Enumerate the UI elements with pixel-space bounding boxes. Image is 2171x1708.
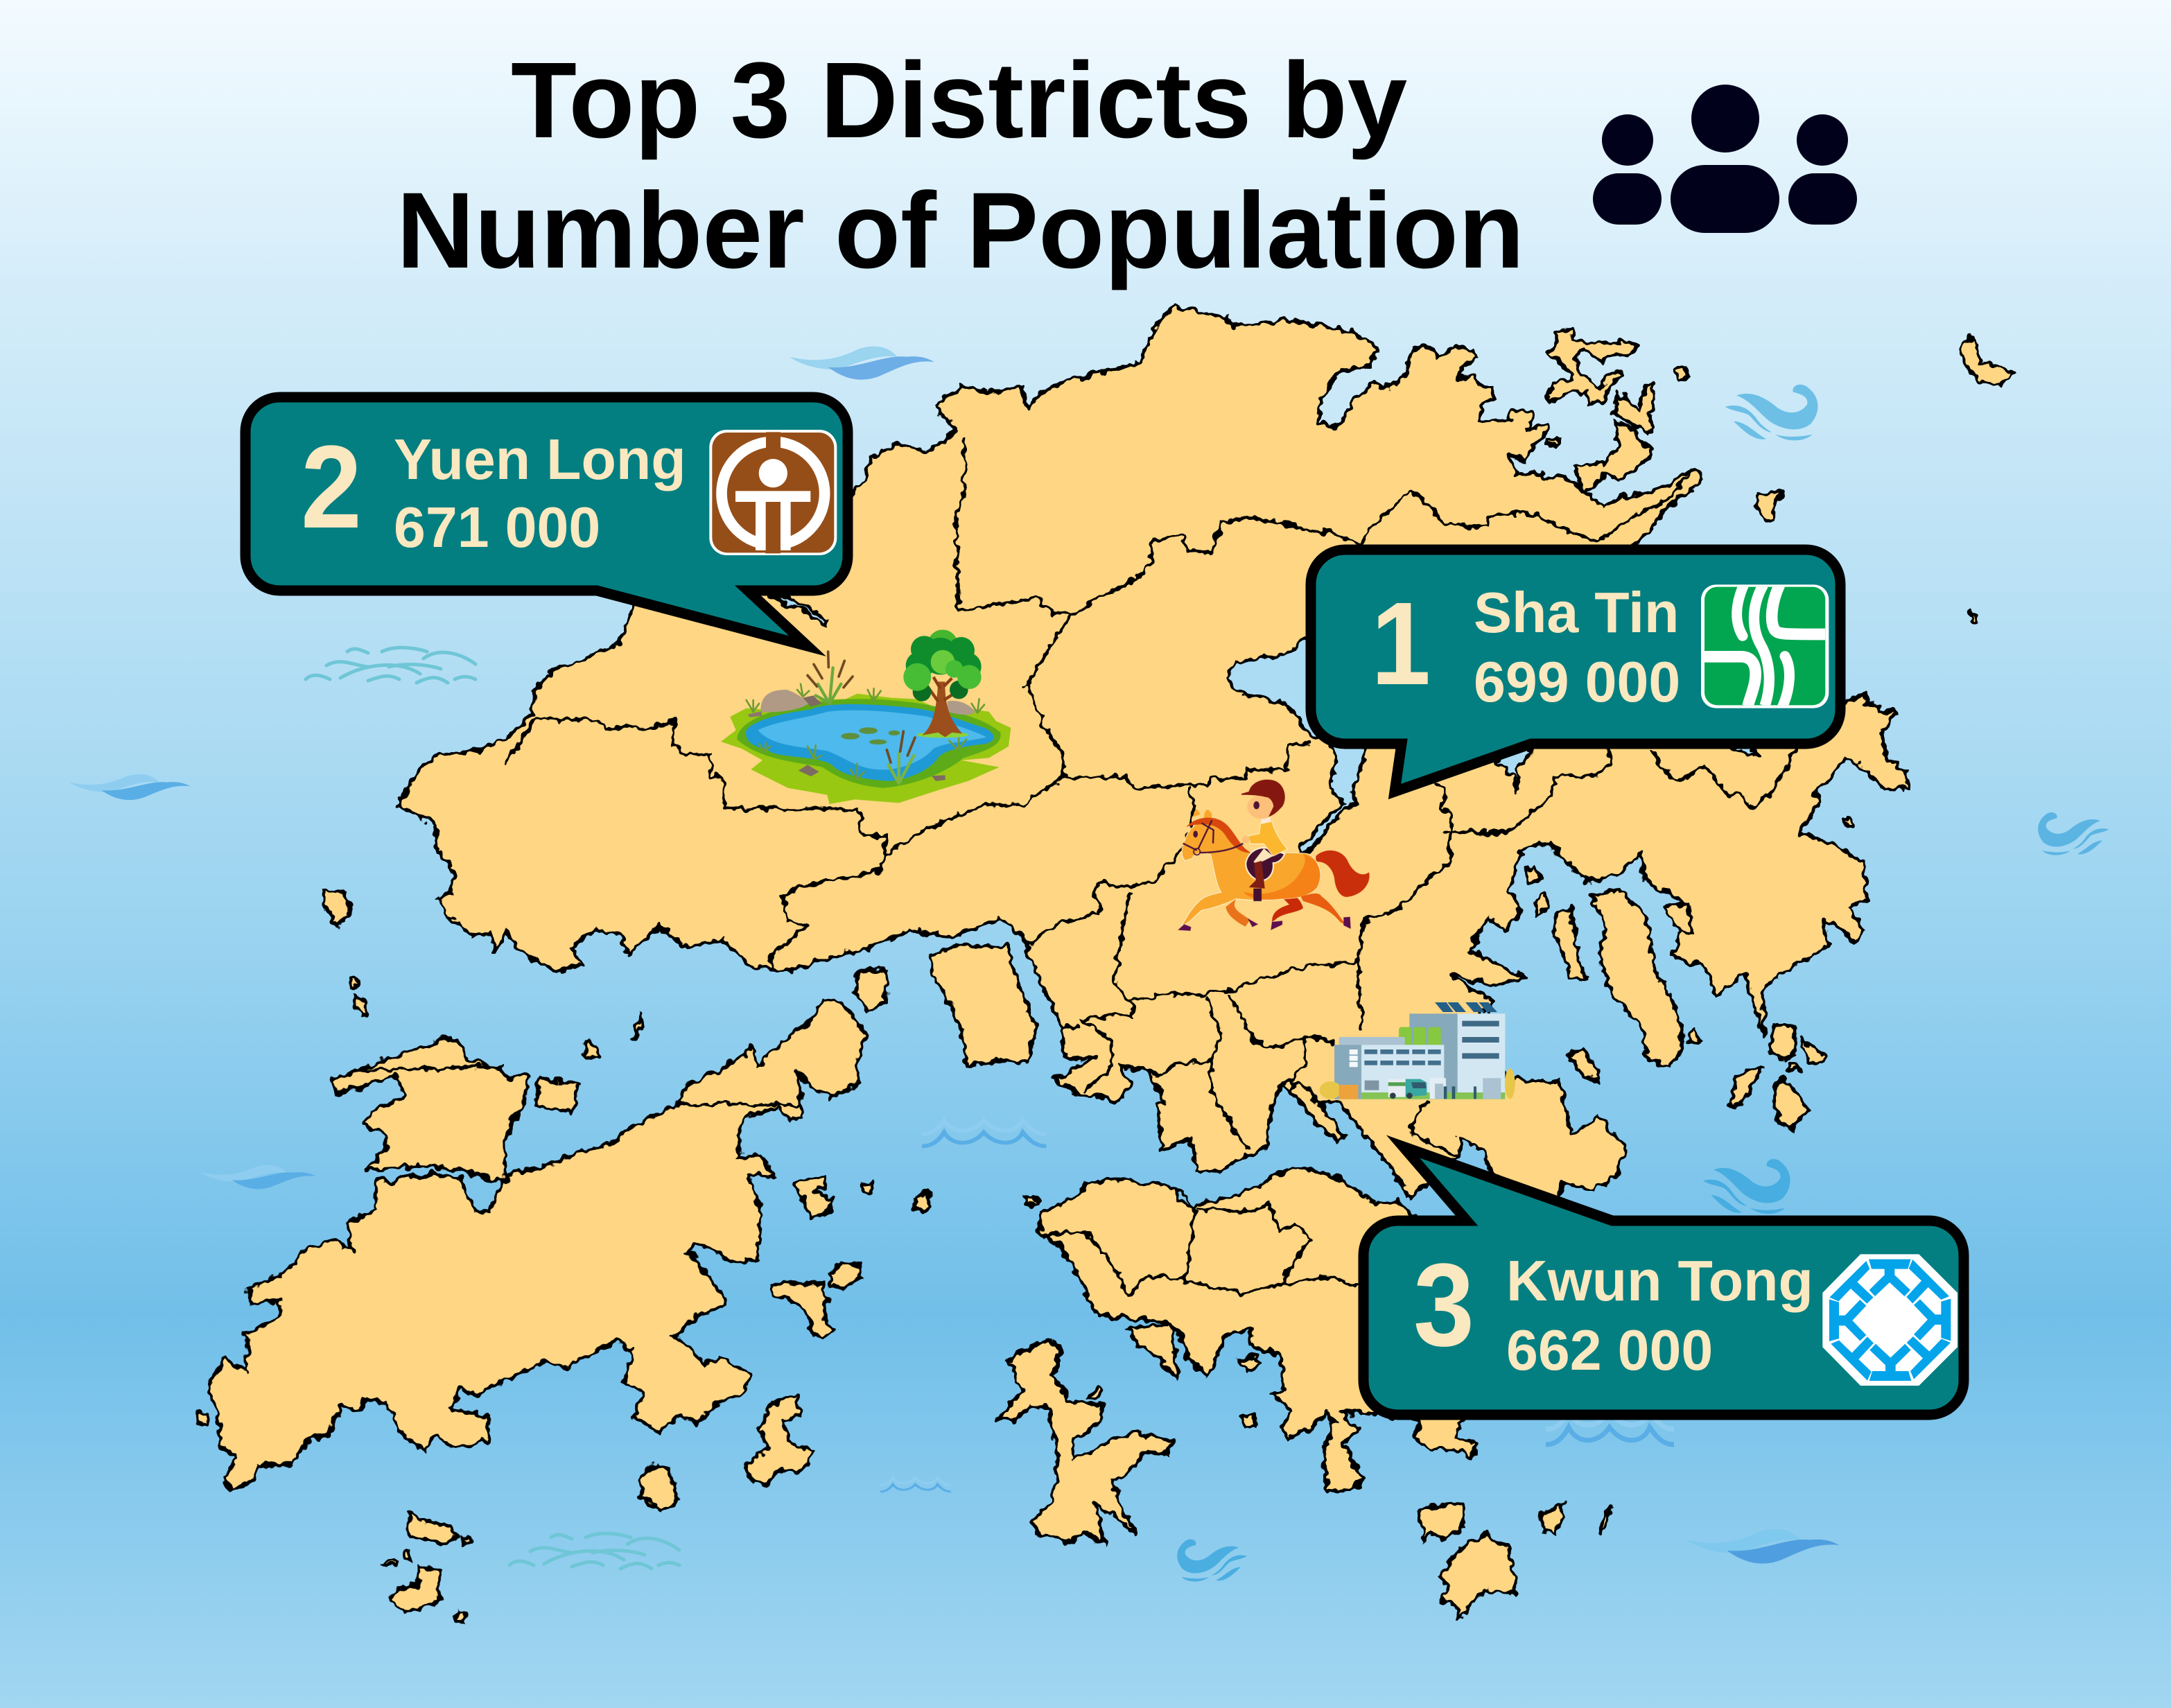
illustration: pond and tree [721, 629, 1011, 804]
saddle [1246, 848, 1284, 880]
truck box [1388, 1079, 1406, 1097]
decorative sea waves [69, 347, 2109, 1582]
callout: Kwun Tong rank 3 [1363, 1147, 1964, 1415]
southern islands [999, 1024, 1824, 1618]
rider leg [1253, 848, 1273, 864]
district name: Sha Tin [1474, 581, 1679, 645]
callout bubble [1363, 1147, 1964, 1415]
callout: Yuen Long rank 2 [245, 397, 848, 646]
loading door [1483, 1078, 1501, 1099]
hind quarter shade [1243, 854, 1320, 900]
Deep Bay inlet [770, 595, 825, 626]
callout bubble [245, 397, 848, 646]
rank number: 2 [301, 421, 362, 553]
small western islands [196, 970, 1037, 1623]
gate house door [1435, 1083, 1443, 1099]
illustration: factory [1319, 1002, 1515, 1099]
northern islands [1546, 329, 1786, 519]
tree islet [917, 732, 968, 738]
Lung Kwu Chau [322, 889, 349, 926]
low building roof [1339, 1037, 1405, 1046]
population: 699 000 [1474, 650, 1680, 714]
truck wheels [1390, 1092, 1413, 1099]
truck stripe [1388, 1082, 1406, 1086]
Hong Kong Island [999, 1024, 1824, 1618]
Lantau Island and western islands [196, 970, 1037, 1623]
title: Top 3 Districts by [511, 40, 1407, 160]
inner bays [1227, 638, 1363, 851]
shrubs [1319, 1068, 1515, 1099]
rank number: 1 [1371, 578, 1431, 710]
horse body [1182, 820, 1320, 925]
water highlight [758, 711, 986, 770]
district emblem: Kwun Tong [1822, 1254, 1958, 1386]
tall building windows [1462, 1021, 1499, 1058]
Hong Kong Island boundaries [1042, 1187, 1360, 1296]
horse eye [1193, 830, 1198, 837]
tall building front [1458, 1013, 1505, 1099]
workers [1444, 1086, 1476, 1099]
callout bubble [1311, 550, 1840, 792]
population: 662 000 [1506, 1318, 1713, 1382]
mane [1187, 818, 1251, 853]
airport runway line [357, 1067, 501, 1070]
side vents [1350, 1049, 1358, 1067]
water [746, 704, 994, 781]
truck cab [1406, 1079, 1427, 1097]
Sai Kung islands [1526, 335, 2014, 1066]
population: 671 000 [394, 496, 600, 559]
girth [1253, 889, 1262, 901]
district emblem: Yuen Long [709, 430, 837, 555]
low building side [1334, 1045, 1362, 1099]
grass tufts [747, 684, 984, 780]
New Territories and Kowloon mainland [322, 306, 2014, 1219]
green tanks [1399, 1027, 1441, 1048]
title [396, 40, 1524, 291]
solar panels [1435, 1002, 1497, 1012]
Lantau boundary line [676, 1104, 800, 1105]
lawn strip [1361, 1092, 1505, 1099]
gate house [1430, 1078, 1446, 1099]
hooves [1178, 917, 1351, 931]
Plover Cove inlet [1495, 741, 1534, 794]
rider eye [1253, 801, 1259, 809]
rider collar [1261, 817, 1271, 825]
illustration: horse rider [1178, 780, 1370, 931]
district name: Kwun Tong [1506, 1249, 1813, 1313]
rocks [748, 690, 975, 781]
near hind leg [1301, 894, 1346, 925]
pond grass [721, 694, 1011, 804]
district boundaries [507, 437, 1795, 1156]
low building windows [1364, 1049, 1441, 1090]
lily pads [841, 727, 900, 744]
truck window [1411, 1082, 1427, 1088]
orange crates [1339, 1085, 1358, 1099]
district emblem: Sha Tin [1701, 582, 1829, 708]
rider head [1247, 795, 1276, 819]
tree trunk [922, 681, 962, 737]
map of Hong Kong [196, 306, 2014, 1623]
bridle [1183, 820, 1243, 853]
darker grass ring [737, 699, 1001, 788]
far legs [1226, 895, 1303, 927]
reeds [808, 652, 915, 783]
small inlet north east [1735, 742, 1757, 756]
district name: Yuen Long [394, 428, 686, 491]
Chek Lap Kok airport island [331, 1037, 530, 1182]
tree foliage [903, 629, 982, 702]
ears [1194, 810, 1212, 825]
tree branches [927, 677, 964, 702]
boot [1249, 861, 1265, 889]
rider hand [1242, 836, 1250, 843]
rank number: 3 [1413, 1239, 1474, 1371]
tall building side [1409, 1013, 1458, 1099]
icon: people group [1593, 85, 1857, 233]
low building front [1361, 1045, 1444, 1099]
title: Number of Population [396, 171, 1524, 291]
rider jacket [1248, 821, 1287, 856]
callout: Sha Tin rank 1 [1311, 550, 1840, 792]
helmet [1241, 780, 1285, 817]
tail [1316, 851, 1370, 897]
Tsing Yi island [932, 946, 1036, 1066]
